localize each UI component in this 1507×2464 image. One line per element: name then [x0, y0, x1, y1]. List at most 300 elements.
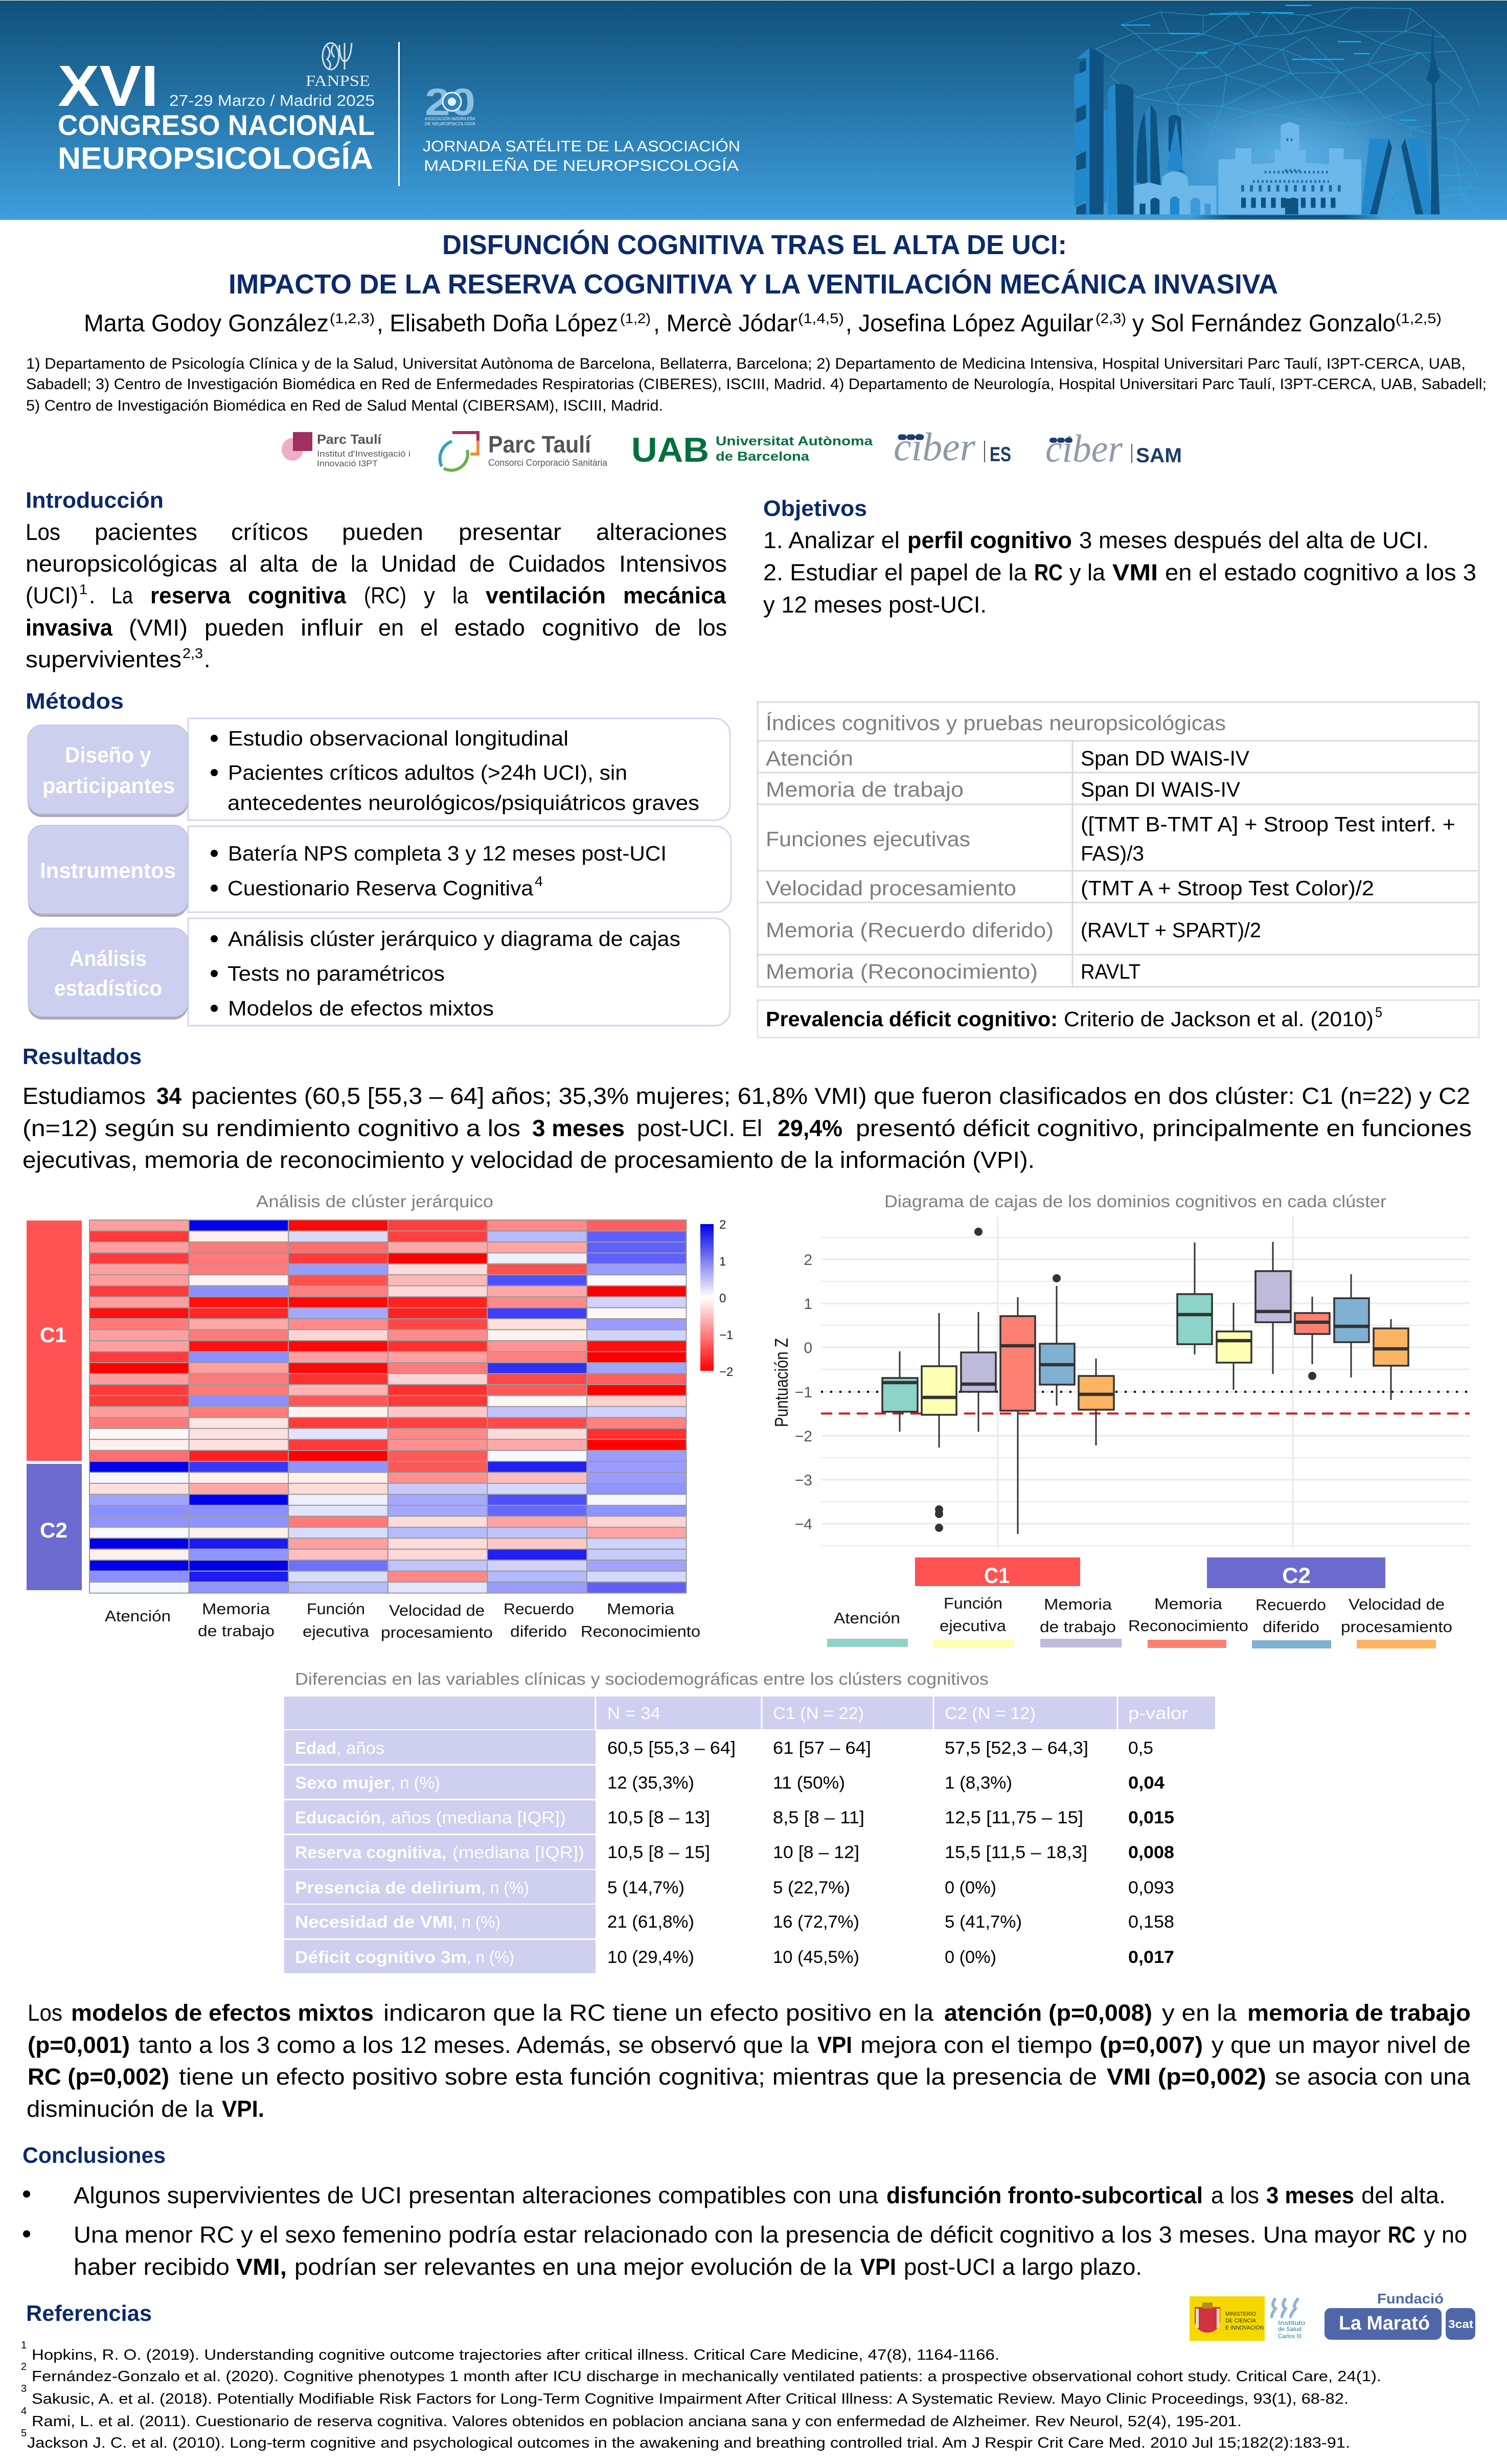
logo: Instituto de Salud Carlos III — [1272, 2298, 1305, 2340]
table: cognitive indices and tests — [758, 702, 1479, 987]
introduction paragraph: la — [452, 582, 469, 608]
row: reserva cognitiva: 15,5 [11,5 – 18,3] — [945, 1843, 1087, 1862]
introduction paragraph: pueden — [204, 615, 284, 641]
introduction paragraph: los — [698, 615, 727, 641]
row: edad: 0,5 — [1128, 1738, 1153, 1758]
logo: UAB: Universitat Autònoma — [716, 434, 873, 448]
authors: (1,2,5) — [1396, 310, 1442, 326]
box plot legend: Atención — [834, 1609, 900, 1627]
heatmap column labels: Velocidad de — [389, 1601, 485, 1619]
mixed effects paragraph: memoria de trabajo — [1247, 2000, 1471, 2026]
box plot legend: ejecutiva — [940, 1617, 1007, 1635]
logo: Parc Taulí I3PT — [282, 432, 410, 468]
cluster bar C1: C1 — [40, 1323, 66, 1347]
introduction paragraph: estado — [454, 615, 525, 641]
results paragraph: 3 meses — [532, 1115, 625, 1141]
y axis labels: −1 — [795, 1384, 812, 1401]
colour scale legend: 1 — [719, 1255, 726, 1269]
introduction paragraph: Unidad — [381, 551, 456, 577]
method row: instrumentos: Batería NPS completa 3 y 12 meses post-UCI — [228, 842, 667, 865]
logo: La Marató: La Marató — [1339, 2313, 1430, 2334]
reference list — [21, 2340, 1381, 2451]
box plot legend: diferido — [1263, 1618, 1319, 1636]
row: edad: , años — [336, 1738, 384, 1757]
congress date: 27-29 Marzo / Madrid 2025 — [169, 92, 375, 109]
box plot legend: Memoria — [1044, 1595, 1112, 1613]
mixed effects paragraph: (p=0,001) — [28, 2032, 130, 2058]
row: reserva cognitiva: 0,008 — [1128, 1843, 1174, 1862]
row: sexo — [284, 1766, 1164, 1799]
mixed effects paragraph: mejora con el tiempo — [860, 2032, 1092, 2058]
introduction paragraph: Intensivos — [619, 551, 727, 577]
method row: análisis estadístico: Análisis — [70, 946, 147, 971]
reference list: 2 — [21, 2361, 27, 2372]
method row: diseño y participantes: Pacientes críticos adultos (>24h UCI), sin — [228, 761, 627, 784]
heatmap column labels — [105, 1600, 700, 1641]
introduction paragraph: ventilación — [486, 582, 606, 608]
box plot legend: procesamiento — [1341, 1618, 1452, 1636]
logo: UAB: UAB — [631, 431, 709, 469]
row: delirium: , n (%) — [481, 1878, 529, 1897]
introduction paragraph: al — [229, 551, 247, 577]
method row: instrumentos: 4 — [535, 873, 543, 889]
objectives list: en el estado cognitivo a los 3 — [1165, 559, 1476, 585]
logo: La Marató — [1325, 2291, 1475, 2340]
authors — [84, 309, 1442, 336]
congress name line 1: CONGRESO NACIONAL — [58, 109, 375, 141]
introduction paragraph: (UCI) — [26, 582, 78, 608]
mixed effects paragraph: tanto a los 3 como a los 12 meses. Además, se observó que la — [139, 2032, 809, 2058]
objectives list — [763, 527, 1476, 618]
row: delirium: 5 (22,7%) — [773, 1878, 850, 1897]
method row: instrumentos: Instrumentos — [40, 858, 176, 883]
row: delirium: Presencia de delirium — [295, 1878, 481, 1897]
heading: introducción: Introducción — [26, 488, 164, 513]
heatmap column labels: Memoria — [202, 1600, 270, 1618]
mixed effects paragraph: tiene un efecto positivo sobre esta función cognitiva; mientras que la presencia de — [179, 2064, 1097, 2090]
objectives list: y 12 meses post-UCI. — [763, 592, 987, 618]
row: déficit: 0,017 — [1128, 1948, 1174, 1967]
colour scale legend: 2 — [719, 1218, 726, 1232]
header row: N = 34 — [607, 1704, 660, 1723]
illustration: Madrid skyline with network dome — [1075, 6, 1480, 219]
introduction paragraph: de — [655, 615, 681, 641]
conclusion bullet 2: VPI — [860, 2254, 896, 2280]
introduction paragraph: de — [469, 551, 495, 577]
heatmap column labels: Atención — [105, 1607, 171, 1625]
conclusion bullet 1: disfunción fronto-subcortical — [886, 2182, 1203, 2208]
banner header — [0, 1, 1507, 220]
introduction paragraph: (VMI) — [129, 615, 188, 641]
logo: Ministerio de Ciencia: E INNOVACIÓN — [1225, 2324, 1264, 2331]
row: VMI: 0,158 — [1128, 1912, 1174, 1932]
results paragraph: 34 — [156, 1083, 181, 1109]
boxes: cluster C2 — [1177, 1242, 1408, 1400]
logo: La Marató: 3cat — [1448, 2318, 1474, 2331]
heading: conclusiones: Conclusiones — [22, 2143, 166, 2168]
row: edad: 60,5 [55,3 – 64] — [607, 1738, 736, 1758]
reference list: Hopkins, R. O. (2019). Understanding cognitive outcome trajectories after critical illness. Critical Care Medicine, 47(8), 1164-1166. — [32, 2347, 999, 2363]
table: cognitive indices and tests: Índices cognitivos y pruebas neuropsicológicas — [766, 711, 1226, 735]
method row: análisis estadístico: Análisis clúster jerárquico y diagrama de cajas — [228, 927, 680, 951]
table: cognitive indices and tests: FAS)/3 — [1081, 842, 1144, 865]
panel: hierarchical cluster heatmap — [27, 1192, 733, 1641]
logo: ciber ES: ciber — [894, 424, 976, 469]
row: déficit: 10 (45,5%) — [773, 1948, 859, 1967]
icon: 20 anniversary logo: DE NEUROPSICOLOGÍA — [425, 122, 476, 126]
row: delirium: 0 (0%) — [945, 1878, 996, 1897]
row: sexo: 12 (35,3%) — [607, 1773, 694, 1793]
box plot legend: Recuerdo — [1255, 1596, 1326, 1614]
section: methods — [26, 689, 731, 1026]
conclusion bullet 2 — [23, 2222, 1467, 2280]
row: déficit: 10 (29,4%) — [607, 1948, 694, 1967]
logo: Parc Taulí Consorci: Consorci Corporació Sanitària — [488, 458, 608, 468]
row: reserva cognitiva: 10 [8 – 12] — [773, 1843, 859, 1862]
title: IMPACTO DE LA RESERVA COGNITIVA Y LA VENTILACIÓN MECÁNICA INVASIVA — [229, 269, 1278, 300]
chart title: Diagrama de cajas de los dominios cognitivos en cada clúster — [884, 1192, 1386, 1211]
cluster bar C2: C2 — [40, 1518, 67, 1542]
heatmap — [89, 1220, 687, 1593]
row: reserva cognitiva: (mediana [IQR]) — [452, 1843, 584, 1862]
logo: Instituto de Salud Carlos III: Carlos III — [1278, 2333, 1302, 2340]
row: déficit: , n (%) — [467, 1948, 514, 1966]
introduction paragraph: presentar — [459, 519, 561, 545]
logo: ciber SAM: SAM — [1136, 444, 1182, 467]
cluster bar C1 — [27, 1220, 82, 1461]
title — [229, 230, 1278, 300]
cluster label C2: C2 — [1282, 1564, 1311, 1588]
mixed effects paragraph: indicaron que la RC tiene un efecto positivo en la — [383, 2000, 934, 2026]
heatmap column labels: Recuerdo — [504, 1600, 574, 1618]
section: objectives — [763, 496, 1476, 618]
row: edad: Edad — [295, 1738, 336, 1757]
heatmap column labels: diferido — [510, 1622, 567, 1640]
objectives list: 1. Analizar el — [763, 527, 900, 553]
mixed effects paragraph: (p=0,007) — [1100, 2032, 1203, 2058]
table: cluster differences — [284, 1669, 1215, 1973]
authors: (1,4,5) — [798, 310, 844, 326]
reference list: 5 — [21, 2428, 27, 2439]
row: edad: 61 [57 – 64] — [773, 1738, 871, 1758]
introduction paragraph: mecánica — [623, 582, 726, 608]
box plot legend: Función — [944, 1594, 1002, 1612]
panel: box plot of cognitive domains — [771, 1192, 1470, 1648]
results paragraph: pacientes (60,5 [55,3 – 64] años; 35,3% mujeres; 61,8% VMI) que fueron clasificados en dos clúster: C1 (n=22) y C2 — [191, 1083, 1470, 1109]
callout: prevalence criterion: Criterio de Jackson et al. (2010) — [1064, 1007, 1374, 1031]
results paragraph: post-UCI. El — [637, 1115, 762, 1141]
threshold line -1.5 — [821, 1412, 1470, 1414]
objectives list: y la — [1069, 559, 1106, 585]
mixed effects paragraph — [27, 2000, 1471, 2122]
plot grid — [821, 1217, 1470, 1549]
heading: referencias: Referencias — [26, 2301, 152, 2326]
introduction paragraph — [26, 519, 727, 672]
introduction paragraph: críticos — [231, 519, 308, 545]
mixed effects paragraph: VMI (p=0,002) — [1107, 2064, 1266, 2090]
reference list: Rami, L. et al. (2011). Cuestionario de reserva cognitiva. Valores obtenidos en poblacion anciana sana y con enfermedad de Alzheimer. Rev Neurol, 52(4), 195-201. — [32, 2413, 1242, 2430]
row: VMI: 16 (72,7%) — [773, 1912, 859, 1932]
logo: La Marató: Fundació — [1377, 2291, 1444, 2307]
authors: , Josefina López Aguilar — [846, 309, 1093, 336]
y axis labels: −2 — [795, 1428, 812, 1445]
FANPSE wordmark: FANPSE — [306, 72, 370, 89]
y axis title: Puntuación Z — [771, 1338, 792, 1427]
icon: 20 anniversary logo: ASOCIACIÓN MADRILEÑA — [425, 117, 476, 121]
row: déficit — [284, 1940, 1174, 1973]
reference list: Fernández-Gonzalo et al. (2020). Cognitive phenotypes 1 month after ICU discharge in mechanically ventilated patients: a prospective observational cohort study. Critical Care, 24(1). — [32, 2368, 1381, 2385]
mixed effects paragraph: y en la — [1162, 2000, 1237, 2026]
introduction paragraph: en — [378, 615, 404, 641]
table: cognitive indices and tests: Memoria (Recuerdo diferido) — [766, 918, 1054, 942]
authors: , Elisabeth Doña López — [377, 309, 618, 336]
authors: (2,3) — [1095, 310, 1126, 326]
reference list: Jackson J. C. et al. (2010). Long-term cognitive and psychological outcomes in the awakening and breathing controlled trial. Am J Respir Crit Care Med. 2010 Jul 15;182(2):183-91. — [27, 2435, 1350, 2451]
boxes: cluster C1 — [882, 1228, 1114, 1534]
row: sexo: Sexo mujer — [295, 1773, 391, 1792]
mixed effects paragraph: VPI — [817, 2032, 852, 2058]
icon: FANPSE logo — [323, 43, 352, 70]
reference list: 3 — [21, 2383, 27, 2394]
heading: objetivos: Objetivos — [763, 496, 867, 521]
reference list: 1 — [21, 2340, 27, 2351]
y axis labels: −4 — [795, 1516, 812, 1533]
mixed effects paragraph: modelos de efectos mixtos — [71, 2000, 374, 2026]
introduction paragraph: . — [89, 582, 96, 608]
colour scale legend: 0 — [719, 1292, 726, 1305]
satellite session text line 2: MADRILEÑA DE NEUROPSICOLOGÍA — [424, 157, 739, 174]
introduction paragraph: de — [311, 551, 338, 577]
objectives list: perfil cognitivo — [907, 527, 1072, 553]
congress title XVI: XVI — [58, 54, 158, 118]
funder logos — [1190, 2291, 1475, 2341]
section: references — [21, 2301, 1381, 2451]
box plot legend: Memoria — [1154, 1595, 1223, 1613]
row: sexo: 0,04 — [1128, 1773, 1164, 1793]
row: educación: Educación — [295, 1808, 381, 1827]
introduction paragraph: reserva — [150, 582, 231, 608]
table: cognitive indices and tests: ([TMT B-TMT A] + Stroop Test interf. + — [1081, 812, 1455, 836]
row: educación: 10,5 [8 – 13] — [607, 1808, 710, 1827]
authors: y Sol Fernández Gonzalo — [1132, 309, 1396, 336]
table: cognitive indices and tests: (TMT A + Stroop Test Color)/2 — [1081, 876, 1374, 900]
logo: Instituto de Salud Carlos III: Instituto — [1278, 2319, 1305, 2326]
row: educación — [284, 1800, 1174, 1834]
method row: análisis estadístico — [28, 918, 730, 1026]
row: sexo: 1 (8,3%) — [945, 1773, 1012, 1793]
section: results intro — [22, 1044, 1472, 1173]
row: VMI — [284, 1905, 1174, 1938]
introduction paragraph: alta — [260, 551, 299, 577]
y axis labels: −3 — [795, 1472, 812, 1489]
row: reserva cognitiva: 10,5 [8 – 15] — [607, 1843, 710, 1862]
results paragraph: (n=12) según su rendimiento cognitivo a los — [22, 1115, 520, 1141]
heatmap column labels: de trabajo — [198, 1622, 275, 1640]
logo: Parc Taulí I3PT: Innovació I3PT — [317, 459, 378, 468]
row: VMI: Necesidad de VMI — [295, 1912, 453, 1931]
cluster label C1 — [915, 1557, 1080, 1588]
results paragraph: ejecutivas, memoria de reconocimiento y velocidad de procesamiento de la información (VPI). — [22, 1147, 1035, 1173]
objectives list: 3 meses después del alta de UCI. — [1079, 527, 1429, 553]
satellite session text line 1: JORNADA SATÉLITE DE LA ASOCIACIÓN — [423, 138, 740, 155]
conclusion bullet 1 — [23, 2182, 1446, 2208]
logo: Instituto de Salud Carlos III: de Salud — [1278, 2325, 1302, 2333]
authors: Marta Godoy González — [84, 309, 329, 336]
row: educación: 12,5 [11,75 – 15] — [945, 1808, 1083, 1827]
row: sexo: , n (%) — [391, 1773, 440, 1792]
conclusion bullet 2: Una menor RC y el sexo femenino podría estar relacionado con la presencia de déficit cognitivo a los 3 meses. Una mayor — [74, 2222, 1381, 2248]
table: cognitive indices and tests: Velocidad procesamiento — [766, 876, 1016, 900]
conclusion bullet 2: VMI, — [236, 2254, 287, 2280]
conclusion bullet 1: del alta. — [1361, 2182, 1446, 2208]
introduction paragraph: y — [424, 582, 435, 608]
introduction paragraph: pacientes — [95, 519, 197, 545]
row: reserva cognitiva: Reserva cognitiva, — [295, 1843, 446, 1862]
header row — [284, 1697, 1215, 1729]
row: delirium — [284, 1870, 1174, 1904]
conclusion bullet 2: y no — [1424, 2222, 1467, 2248]
row: delirium: 5 (14,7%) — [607, 1878, 684, 1897]
box plot legend: Velocidad de — [1349, 1595, 1445, 1613]
results paragraph: presentó déficit cognitivo, principalmente en funciones — [856, 1115, 1472, 1141]
heading: métodos: Métodos — [26, 689, 124, 714]
conclusion bullet 2: RC — [1388, 2222, 1415, 2248]
mixed effects paragraph: disminución de la — [27, 2096, 214, 2122]
introduction paragraph: La — [111, 582, 133, 608]
introduction paragraph: el — [420, 615, 438, 641]
box plot legend — [827, 1594, 1452, 1648]
heading: resultados: Resultados — [22, 1044, 142, 1069]
row: edad: 57,5 [52,3 – 64,3] — [945, 1738, 1088, 1758]
row: VMI: 5 (41,7%) — [945, 1912, 1022, 1932]
logo: Ministerio de Ciencia — [1190, 2296, 1265, 2341]
affiliations: Sabadell; 3) Centro de Investigación Biomédica en Red de Enfermedades Respiratorias (CIBERES), ISCIII, Madrid. 4) Departamento de Neurología, Hospital Universitari Parc Taulí, I3PT-CERCA, UAB, Sabadell; — [26, 376, 1487, 393]
conclusion bullet 2: post-UCI a largo plazo. — [904, 2254, 1142, 2280]
y axis labels: 0 — [804, 1340, 812, 1357]
section: conclusions — [22, 2143, 1467, 2280]
authors: , Mercè Jódar — [653, 309, 797, 336]
mixed effects paragraph: RC (p=0,002) — [28, 2064, 169, 2090]
mixed effects paragraph: se asocia con una — [1275, 2064, 1471, 2090]
colour scale legend: −1 — [719, 1328, 733, 1342]
congress name line 2: NEUROPSICOLOGÍA — [58, 141, 373, 175]
chart title: Análisis de clúster jerárquico — [256, 1192, 493, 1211]
introduction paragraph: pueden — [342, 519, 423, 545]
introduction paragraph: cognitivo — [542, 615, 639, 641]
results paragraph — [22, 1083, 1472, 1173]
objectives list: VMI — [1112, 559, 1158, 585]
affiliations: 5) Centro de Investigación Biomédica en Red de Salud Mental (CIBERSAM), ISCIII, Madrid. — [26, 397, 663, 414]
row: educación: 0,015 — [1128, 1808, 1174, 1827]
colour scale legend: −2 — [719, 1365, 733, 1379]
introduction paragraph: cognitiva — [248, 582, 347, 608]
conclusion bullet 1: 3 meses — [1266, 2182, 1354, 2208]
table title: Diferencias en las variables clínicas y sociodemográficas entre los clústers cognitivos — [295, 1669, 989, 1688]
logo: Ministerio de Ciencia: MINISTERIO — [1225, 2311, 1256, 2317]
reference list: 4 — [21, 2406, 27, 2417]
threshold line -1 — [821, 1391, 1470, 1393]
heatmap column labels: ejecutiva — [303, 1622, 370, 1640]
section: introduction — [26, 488, 727, 672]
cluster label C1: C1 — [984, 1564, 1010, 1588]
authors: (1,2) — [620, 310, 651, 326]
callout: prevalence criterion: 5 — [1375, 1004, 1382, 1020]
table: cognitive indices and tests: Atención — [766, 747, 853, 770]
introduction paragraph: 2,3 — [182, 645, 203, 661]
header row: C1 (N = 22) — [773, 1704, 864, 1723]
colour scale legend — [700, 1218, 733, 1379]
y axis labels: 2 — [804, 1252, 812, 1269]
logo: ciber ES: ES — [990, 443, 1011, 466]
introduction paragraph: neuropsicológicas — [26, 551, 217, 577]
icon: 20 anniversary logo: 20 — [425, 81, 475, 123]
row: déficit: 0 (0%) — [945, 1948, 996, 1967]
institution logos row — [282, 424, 1182, 470]
introduction paragraph: Cuidados — [508, 551, 605, 577]
introduction paragraph: Los — [26, 519, 60, 545]
row: delirium: 0,093 — [1128, 1878, 1174, 1897]
results paragraph: 29,4% — [778, 1115, 842, 1141]
affiliations — [26, 355, 1487, 414]
box plot legend: de trabajo — [1040, 1618, 1116, 1636]
mixed effects paragraph: Los — [28, 2000, 62, 2026]
method row: diseño y participantes: antecedentes neurológicos/psiquiátricos graves — [227, 791, 699, 815]
mixed effects paragraph: y que un mayor nivel de — [1212, 2032, 1471, 2058]
affiliations: 1) Departamento de Psicología Clínica y de la Salud, Universitat Autònoma de Barcelona, Bellaterra, Barcelona; 2) Departamento de Medicina Intensiva, Hospital Universitari Parc Taulí, I3PT-CERCA, UAB, — [26, 355, 1466, 372]
row: VMI: , n (%) — [453, 1912, 500, 1931]
logo: Parc Taulí Consorci — [440, 431, 608, 470]
logo: Ministerio de Ciencia: DE CIENCIA — [1225, 2318, 1257, 2324]
cluster bar C2 — [27, 1464, 82, 1590]
heatmap column labels: Función — [307, 1600, 365, 1618]
row: reserva cognitiva — [284, 1835, 1174, 1869]
introduction paragraph: (RC) — [364, 582, 406, 608]
method row: diseño y participantes — [28, 718, 730, 820]
heatmap column labels: Reconocimiento — [581, 1622, 700, 1640]
cluster label C2 — [1207, 1557, 1385, 1588]
row: educación: , años (mediana [IQR]) — [381, 1808, 566, 1827]
mixed effects paragraph: VPI. — [222, 2096, 264, 2122]
introduction paragraph: influir — [301, 615, 363, 641]
table: cognitive indices and tests: (RAVLT + SPART)/2 — [1081, 918, 1261, 942]
objectives list: RC — [1034, 559, 1063, 585]
heatmap column labels: Memoria — [607, 1600, 675, 1618]
method row: diseño y participantes: participantes — [42, 774, 175, 798]
introduction paragraph: alteraciones — [596, 519, 727, 545]
objectives list: 2. Estudiar el papel de la — [763, 559, 1028, 585]
method row: análisis estadístico: Modelos de efectos mixtos — [228, 997, 494, 1020]
logo: ciber SAM — [1045, 427, 1182, 470]
row: edad — [284, 1730, 1153, 1764]
heatmap column labels: procesamiento — [381, 1623, 493, 1641]
introduction paragraph: la — [351, 551, 368, 577]
box plot legend: Reconocimiento — [1128, 1617, 1248, 1635]
row: sexo: 11 (50%) — [773, 1773, 845, 1793]
mixed effects paragraph: atención (p=0,008) — [944, 2000, 1152, 2026]
table: cognitive indices and tests: Memoria (Reconocimiento) — [766, 960, 1038, 983]
table: cognitive indices and tests: Span DI WAIS-IV — [1081, 778, 1241, 801]
conclusion bullet 1: a los — [1211, 2182, 1259, 2208]
introduction paragraph: 1 — [79, 581, 87, 597]
conclusion bullet 2: haber recibido — [74, 2254, 230, 2280]
title: DISFUNCIÓN COGNITIVA TRAS EL ALTA DE UCI: — [442, 230, 1067, 260]
logo: ciber SAM: ciber — [1045, 427, 1123, 470]
reference list: Sakusic, A. et al. (2018). Potentially Modifiable Risk Factors for Long-Term Cognitive Impairment After Critical Illness: A Systematic Review. Mayo Clinic Proceedings, 93(1), 68-82. — [32, 2391, 1349, 2407]
method row: instrumentos — [28, 825, 731, 917]
table: cognitive indices and tests: Span DD WAIS-IV — [1081, 747, 1250, 770]
conclusion bullet 1: Algunos supervivientes de UCI presentan alteraciones compatibles con una — [74, 2182, 879, 2208]
header row: p-valor — [1128, 1704, 1188, 1723]
